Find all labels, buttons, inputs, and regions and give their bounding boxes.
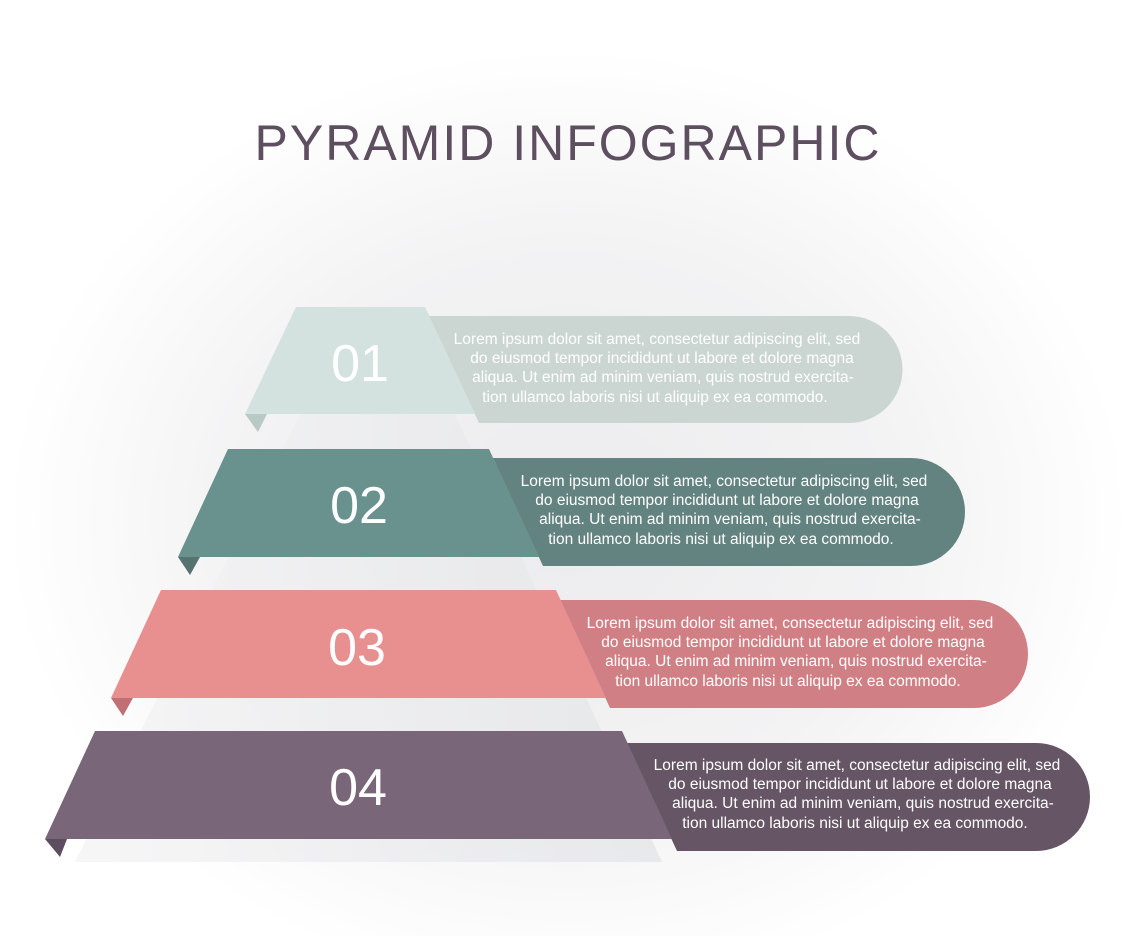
text 2: do eiusmod tempor incididunt ut labore et dolore magna: [535, 492, 919, 509]
text 1: aliqua. Ut enim ad minim veniam, quis nostrud exercita-: [472, 369, 854, 386]
number 03: 03: [328, 619, 386, 677]
text 3: aliqua. Ut enim ad minim veniam, quis nostrud exercita-: [605, 653, 987, 670]
fold 1: [245, 414, 267, 432]
pill 3: [560, 600, 1028, 708]
text 2: tion ullamco laboris nisi ut aliquip ex ea commodo.: [548, 531, 894, 548]
number 01: 01: [331, 335, 389, 393]
text 4: tion ullamco laboris nisi ut aliquip ex ea commodo.: [682, 815, 1028, 832]
pill 4: [627, 743, 1090, 851]
trapezoid 1: [245, 307, 475, 414]
pill 1: [429, 316, 903, 423]
trapezoid 4: [45, 731, 672, 839]
text 1: tion ullamco laboris nisi ut aliquip ex ea commodo.: [482, 389, 828, 406]
trapezoid 3: [111, 590, 606, 698]
text 4: aliqua. Ut enim ad minim veniam, quis nostrud exercita-: [672, 795, 1054, 812]
fold 3: [111, 698, 133, 716]
text 3: Lorem ipsum dolor sit amet, consectetur adipiscing elit, sed: [587, 615, 993, 632]
text 3: tion ullamco laboris nisi ut aliquip ex ea commodo.: [615, 673, 961, 690]
text 4: do eiusmod tempor incididunt ut labore et dolore magna: [668, 776, 1052, 793]
number 02: 02: [330, 477, 388, 535]
text 2: aliqua. Ut enim ad minim veniam, quis nostrud exercita-: [539, 511, 921, 528]
pill 2: [493, 458, 965, 566]
title: PYRAMID INFOGRAPHIC: [255, 115, 881, 171]
number 04: 04: [329, 759, 387, 817]
fold 4: [45, 839, 67, 857]
fold 2: [178, 557, 200, 575]
tier 1: [245, 307, 903, 432]
trapezoid 2: [178, 449, 539, 557]
text 1: do eiusmod tempor incididunt ut labore et dolore magna: [470, 350, 854, 367]
tier 4: [45, 731, 1090, 857]
text 4: Lorem ipsum dolor sit amet, consectetur adipiscing elit, sed: [654, 757, 1060, 774]
tier 3: [111, 590, 1028, 716]
pyramid background shadow: [75, 414, 662, 862]
text 3: do eiusmod tempor incididunt ut labore et dolore magna: [601, 634, 985, 651]
tier 2: [178, 449, 965, 575]
text 1: Lorem ipsum dolor sit amet, consectetur adipiscing elit, sed: [454, 331, 860, 348]
text 2: Lorem ipsum dolor sit amet, consectetur adipiscing elit, sed: [521, 473, 927, 490]
